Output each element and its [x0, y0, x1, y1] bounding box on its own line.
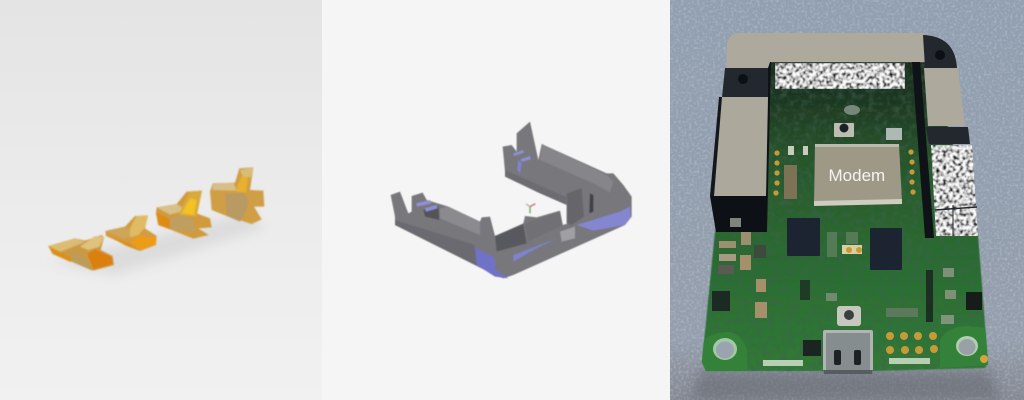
antenna frame: [710, 33, 980, 238]
metal left bar: [714, 97, 768, 196]
contact 2: [105, 215, 157, 251]
left arm inner wall: [440, 207, 480, 235]
CAD model: [391, 122, 632, 278]
panel: modem board photo: [670, 0, 1024, 400]
gold test pads: [773, 149, 938, 354]
speckled patch right: [930, 145, 980, 237]
shadow under contacts: [50, 212, 265, 275]
black left side wall: [710, 196, 767, 232]
shadow beneath board: [690, 370, 1000, 400]
carrier silhouette: [391, 122, 632, 278]
black strip on right arm: [926, 127, 970, 144]
mounting hole right: [940, 326, 988, 368]
inner front block: [495, 224, 527, 252]
silkscreen labels: [763, 360, 803, 366]
passive components: [718, 232, 956, 324]
oval marking: [844, 105, 860, 115]
panel: gold contacts: [0, 0, 322, 400]
contact 1: [48, 235, 114, 271]
metal right bar: [924, 68, 965, 126]
USB button: [837, 306, 861, 326]
grey textured surface: [670, 0, 1024, 400]
black inner walls: [758, 62, 934, 238]
circuit board: [700, 60, 990, 374]
chips: [787, 218, 820, 256]
axis triad: [526, 204, 535, 213]
outer left wall: [395, 220, 495, 275]
black corner top right with screw: [923, 35, 957, 68]
blue highlighted corner and edge: [475, 207, 631, 278]
contact group: [48, 167, 264, 271]
top tactile button: [834, 123, 854, 137]
modem shield can: [814, 144, 902, 206]
speckled patch top: [775, 63, 905, 89]
panel: CAD antenna carrier: [322, 0, 670, 400]
metal texture: [714, 33, 965, 196]
metal top bar: [726, 33, 925, 68]
right arm back wall: [540, 144, 613, 193]
contact 4: [210, 167, 264, 224]
board mottling: [700, 60, 990, 372]
USB-C connector: [823, 330, 873, 374]
mounting hole left: [702, 332, 747, 371]
contact 3: [156, 191, 212, 239]
black corner top left with screw: [722, 68, 768, 97]
modem label: Modem: [828, 166, 885, 185]
